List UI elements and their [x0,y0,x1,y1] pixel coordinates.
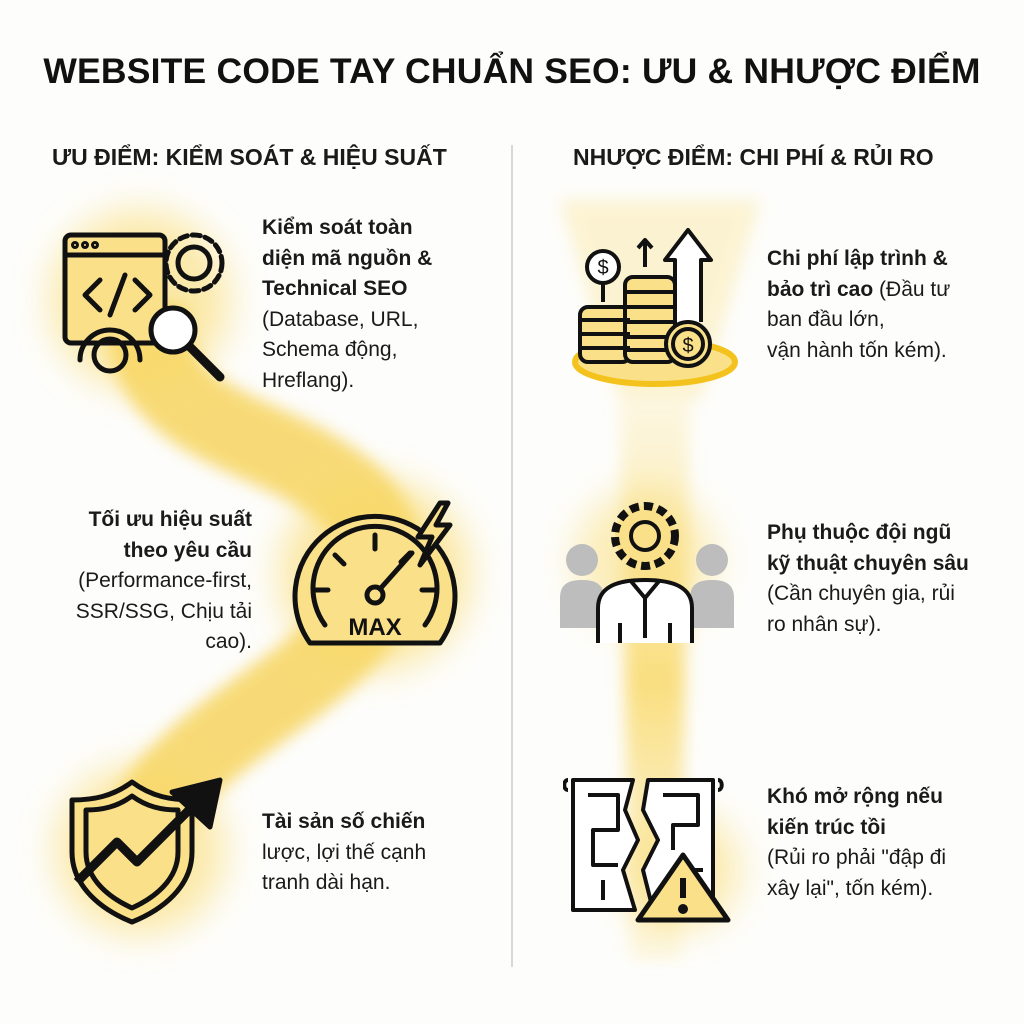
text: pro 3 [262,810,426,894]
text: pro 3: lược, lợi thế cạnh [262,840,426,864]
text: pro 2: Tối ưu hiệu suất [89,508,252,531]
heading: pros: ƯU ĐIỂM: KIỂM SOÁT & HIỆU SUẤT [52,144,447,170]
text: pro 2 [76,508,252,653]
text: con 2: ro nhân sự). [767,612,881,636]
text: con 1 [767,247,950,362]
text: con 1: vận hành tốn kém). [767,338,947,362]
text: pro 2: cao). [205,630,252,653]
text: con 3: Khó mở rộng nếu [767,785,943,808]
divider [511,145,513,967]
text: con 1: Chi phí lập trình & [767,247,948,270]
text: con 3 [767,785,946,900]
heading: cons: NHƯỢC ĐIỂM: CHI PHÍ & RỦI RO [573,144,934,170]
text: pro 1 [262,216,432,392]
text: pro 1: Kiểm soát toàn [262,216,413,239]
text: con 1: ban đầu lớn, [767,308,885,331]
icon: coins stacks [572,228,738,387]
text: con 3: kiến trúc tồi [767,816,886,838]
icon: speedometer MAX: MAX [348,614,402,641]
text: con 2: (Cần chuyên gia, rủi [767,582,955,605]
text: pro 2: SSR/SSG, Chịu tải [76,600,252,622]
text: con 3: xây lại", tốn kém). [767,876,933,900]
icon: expert with gear head [560,502,734,643]
text: pro 1: Hreflang). [262,368,354,392]
title: WEBSITE CODE TAY CHUẨN SEO: ƯU & NHƯỢC ĐIỂM [43,51,981,91]
icon: shield with arrow [70,778,222,924]
icon: coins stacks: $ [597,257,609,279]
text: pro 2: (Performance-first, [78,569,252,592]
icon: broken blueprint with warning [563,778,730,922]
icon: code window with gears [62,232,224,382]
text: pro 3: Tài sản số chiến [262,810,425,833]
icon: coins stacks: $ [682,335,694,357]
text: pro 1: (Database, URL, [262,308,418,330]
text: con 1: bảo trì cao (Đầu tư [767,278,950,300]
text: con 2 [767,521,969,636]
text: pro 2: theo yêu cầu [124,538,252,562]
icon: speedometer MAX [292,500,458,646]
text: con 2: Phụ thuộc đội ngũ [767,521,951,544]
text: con 3: (Rủi ro phải "đập đi [767,846,946,869]
text: pro 1: diện mã nguồn & [262,246,432,270]
text: pro 3: tranh dài hạn. [262,871,390,894]
text: pro 1: Technical SEO [262,277,408,300]
text: pro 1: Schema động, [262,338,397,361]
text: con 2: kỹ thuật chuyên sâu [767,552,969,574]
